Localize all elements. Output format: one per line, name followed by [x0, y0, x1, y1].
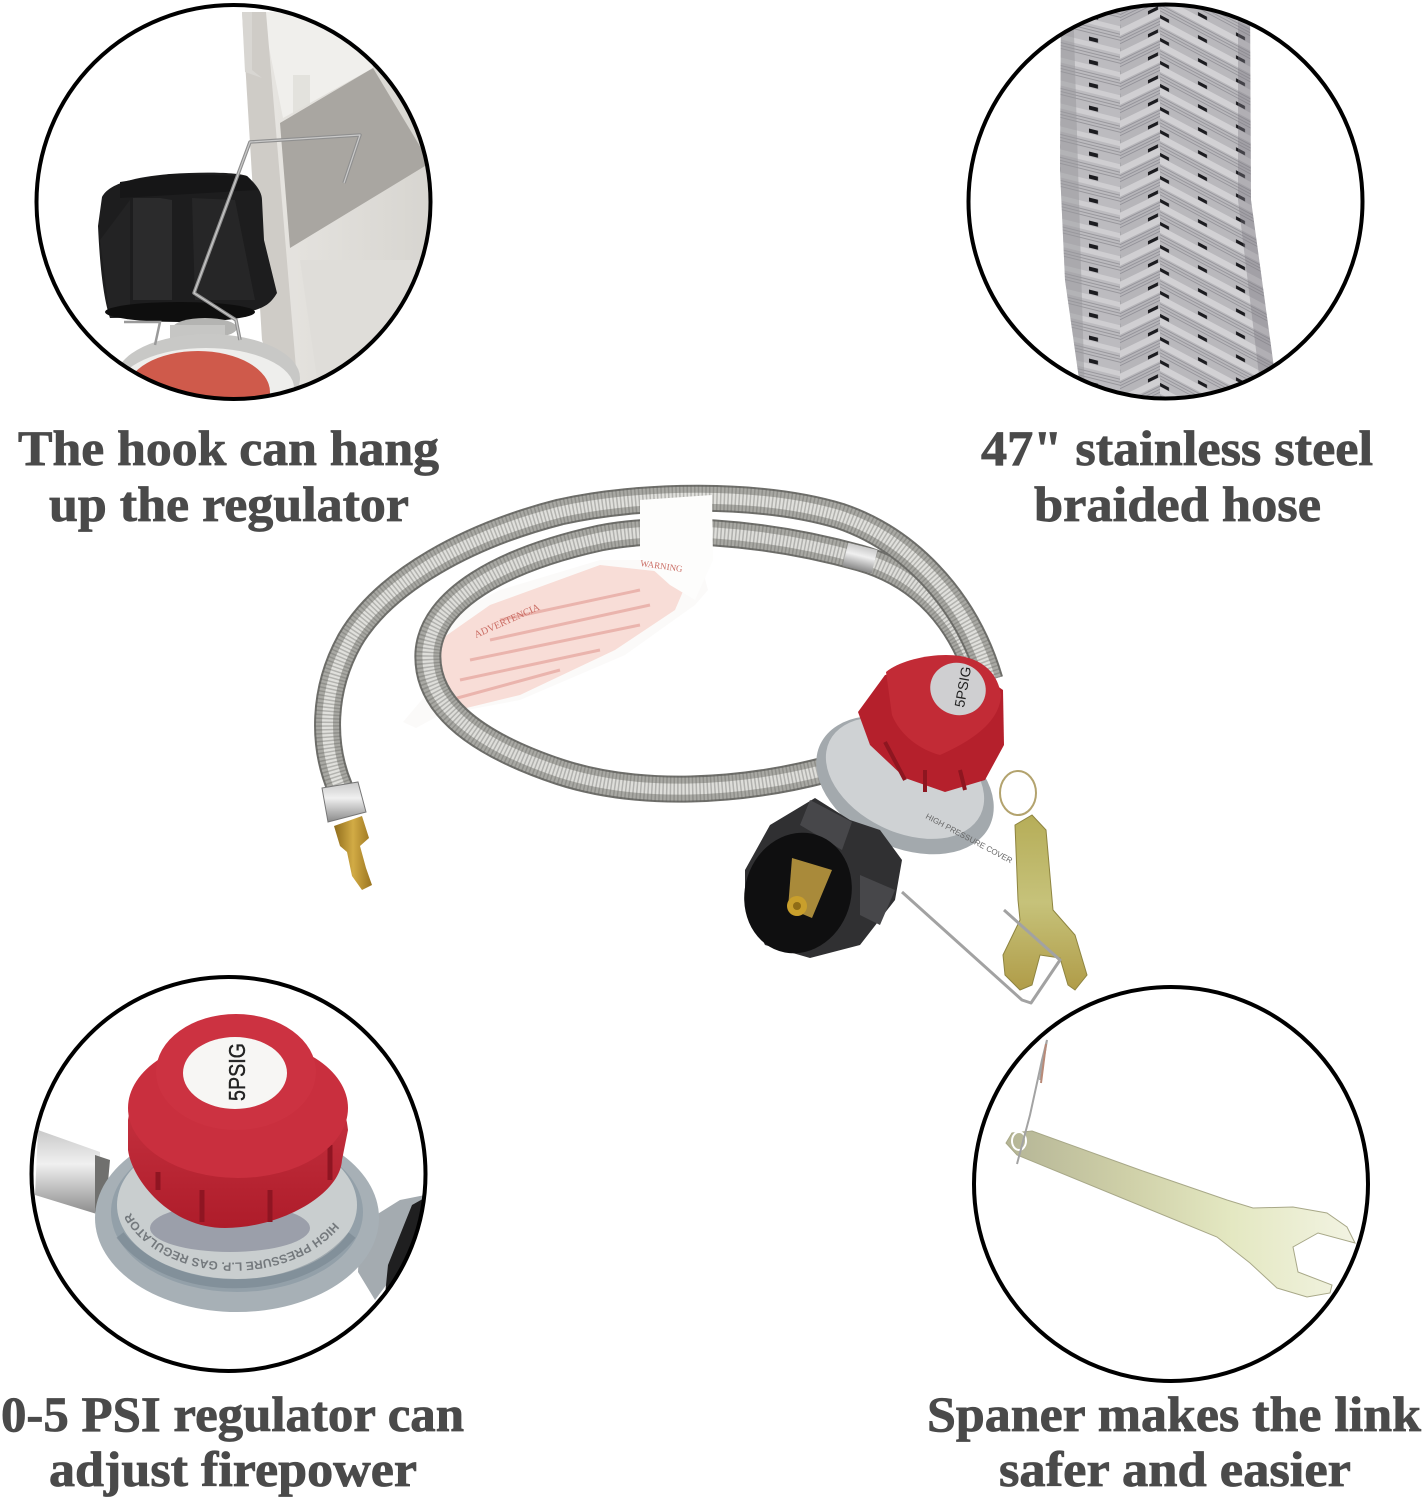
key ring: [1000, 771, 1036, 815]
caption: hook: [18, 420, 439, 532]
knob label: 5PSIG: [951, 665, 974, 709]
red knob cap: [128, 1014, 348, 1178]
caption: hook: up the regulator: [49, 476, 409, 532]
warning tag top strip: WARNING: [640, 558, 684, 574]
panel: spanner detail circle: [974, 987, 1368, 1381]
panel: braided hose detail circle: [968, 0, 1362, 400]
warning tag paper: [403, 560, 708, 728]
red regulator knob: [858, 655, 1004, 792]
wire hook: [902, 892, 1060, 1003]
brass nozzle: [334, 816, 372, 890]
white 5PSIG label: [183, 1037, 287, 1109]
knob label: [923, 655, 993, 723]
wire hook: [124, 135, 360, 345]
hose ferrule: [843, 543, 877, 573]
black gas nut with brass pin: [729, 798, 902, 967]
metal regulator body: [95, 1156, 379, 1312]
caption: hose: [981, 420, 1373, 532]
wrench: [1003, 815, 1087, 990]
brass fitting on the right: [358, 1196, 422, 1300]
spanner: [1006, 1131, 1355, 1297]
caption: regulator: 0-5 PSI regulator can: [1, 1386, 464, 1442]
product photo: hose assembly: [322, 495, 1087, 1003]
regulator cap below nut: [122, 318, 300, 397]
caption: hook: The hook can hang: [18, 420, 439, 476]
metal regulator disc: HIGH PRESSURE COVER: [924, 812, 1014, 865]
caption: spanner: [927, 1386, 1421, 1497]
warning tag paper: ADVERTENCIA: [473, 602, 542, 641]
caption: hose: 47" stainless steel: [981, 420, 1373, 476]
caption: spanner: Spaner makes the link: [927, 1386, 1421, 1442]
caption: regulator: adjust firepower: [49, 1441, 417, 1497]
metal regulator body: HIGH PRESSURE L.P. GAS REGULATOR: [125, 1212, 340, 1271]
hose connector: [35, 1130, 110, 1215]
spanner hanging ring: [1012, 1040, 1047, 1164]
panel: hook detail circle: [36, 5, 440, 433]
black gas nut: [98, 173, 277, 322]
warning tag top strip: [640, 495, 713, 600]
metal regulator disc: [793, 688, 1017, 882]
caption: spanner: safer and easier: [999, 1441, 1351, 1497]
inner hose loop: [428, 532, 985, 789]
caption: regulator: [1, 1386, 464, 1497]
outer hose loop: [328, 498, 990, 788]
caption: hose: braided hose: [1034, 476, 1321, 532]
white 5PSIG label: 5PSIG: [224, 1043, 250, 1101]
red knob skirt: [128, 1116, 348, 1228]
hose end collar: [322, 782, 366, 822]
panel: regulator detail circle: [30, 975, 428, 1373]
